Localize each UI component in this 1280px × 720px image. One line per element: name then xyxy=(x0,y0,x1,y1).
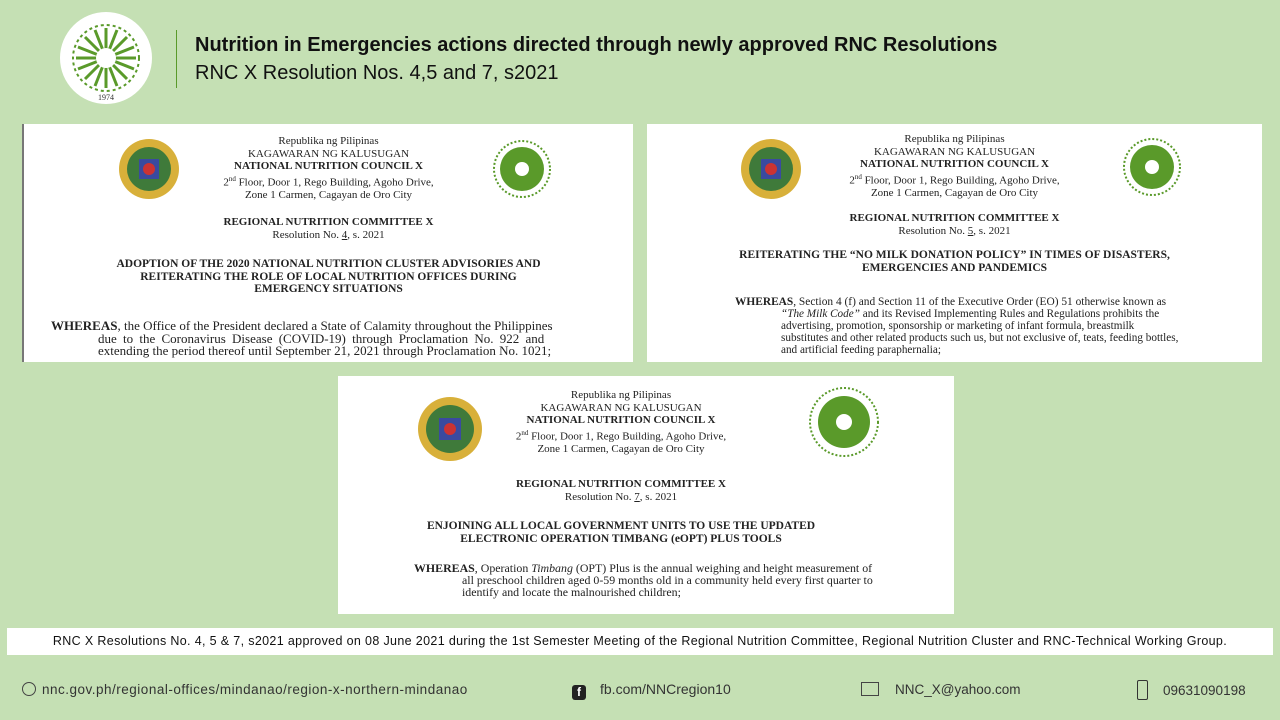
footer: phone xyxy=(1137,680,1246,700)
panel: resolution 4: Zone 1 Carmen, Cagayan de Oro City xyxy=(245,189,412,201)
panel: resolution 7: all preschool children aged 0-59 months old in a community held every first quarter to xyxy=(462,573,873,587)
panel: resolution 4: REGIONAL NUTRITION COMMITTEE X xyxy=(224,216,433,228)
panel: resolution 5: REGIONAL NUTRITION COMMITTEE X xyxy=(850,212,1059,224)
caption bar: RNC X Resolutions No. 4, 5 & 7, s2021 approved on 08 June 2021 during the 1st Semester Meeting of the Regional Nutrition Committee, Regional Nutrition Cluster and RNC-Technical Working Group. xyxy=(53,634,1227,648)
panel: resolution 7: 2nd Floor, Door 1, Rego Building, Agoho Drive, xyxy=(516,428,726,442)
panel: resolution 4: extending the period thereof until September 21, 2021 through Proclamation No. 1021; xyxy=(98,343,551,358)
footer: phone: 09631090198 xyxy=(1163,683,1246,698)
panel: resolution 5: substitutes and other related products such us, but not exclusive of, teats, feeding bottles, xyxy=(781,332,1178,344)
footer: facebook: f xyxy=(577,685,581,699)
caption bar xyxy=(7,628,1273,655)
panel: resolution 7: Resolution No. 7, s. 2021 xyxy=(565,490,677,502)
panel: resolution 4: Resolution No. 4, s. 2021 xyxy=(272,228,385,240)
panel: resolution 5: advertising, promotion, sponsorship or marketing of infant formula, breastmilk xyxy=(781,320,1134,332)
panel: resolution 5: EMERGENCIES AND PANDEMICS xyxy=(862,262,1047,274)
panel: resolution 4: NATIONAL NUTRITION COUNCIL X xyxy=(234,160,423,172)
divider line xyxy=(176,30,177,88)
panel: resolution 5: Zone 1 Carmen, Cagayan de Oro City xyxy=(871,187,1038,199)
panel: resolution 5: NATIONAL NUTRITION COUNCIL X xyxy=(860,158,1049,170)
panel: resolution 7: identify and locate the malnourished children; xyxy=(462,585,681,599)
panel: resolution 4: due to the Coronavirus Disease (COVID-19) through Proclamation No. 922 and xyxy=(98,330,544,346)
panel: resolution 5: “The Milk Code” and its Revised Implementing Rules and Regulations prohibits the xyxy=(781,308,1159,320)
panel: resolution 5: WHEREAS, Section 4 (f) and Section 11 of the Executive Order (EO) 51 otherwise known as xyxy=(735,296,1166,308)
panel: resolution 4 xyxy=(22,124,633,362)
footer: website: nnc.gov.ph/regional-offices/mindanao/region-x-northern-mindanao xyxy=(42,682,468,697)
logo: national nutrition council xyxy=(60,12,152,104)
panel: resolution 7: REGIONAL NUTRITION COMMITTEE X xyxy=(516,478,726,490)
panel: resolution 7: Zone 1 Carmen, Cagayan de Oro City xyxy=(537,443,705,455)
subtitle: RNC X Resolution Nos. 4,5 and 7, s2021 xyxy=(195,62,559,84)
panel: resolution 7: KAGAWARAN NG KALUSUGAN xyxy=(540,402,702,414)
title: Nutrition in Emergencies actions directed through newly approved RNC Resolutions xyxy=(195,34,997,56)
panel: resolution 5 xyxy=(647,124,1262,362)
panel: resolution 7 xyxy=(338,376,954,614)
panel: resolution 7: Republika ng Pilipinas xyxy=(571,389,671,401)
panel: resolution 5: KAGAWARAN NG KALUSUGAN xyxy=(874,146,1035,158)
panel: resolution 7: NATIONAL NUTRITION COUNCIL X xyxy=(527,414,715,426)
panel: resolution 4: EMERGENCY SITUATIONS xyxy=(254,283,403,295)
panel: resolution 7: ENJOINING ALL LOCAL GOVERNMENT UNITS TO USE THE UPDATED xyxy=(427,520,815,532)
panel: resolution 7: ELECTRONIC OPERATION TIMBANG (eOPT) PLUS TOOLS xyxy=(460,532,782,544)
panel: resolution 4: Republika ng Pilipinas xyxy=(278,135,379,147)
panel: resolution 5: and artificial feeding paraphernalia; xyxy=(781,344,941,356)
panel: resolution 5: Republika ng Pilipinas xyxy=(904,133,1005,145)
panel: resolution 4: 2nd Floor, Door 1, Rego Building, Agoho Drive, xyxy=(223,174,434,188)
panel: resolution 4: KAGAWARAN NG KALUSUGAN xyxy=(248,148,409,160)
footer: email: NNC_X@yahoo.com xyxy=(895,682,1021,697)
panel: resolution 7: WHEREAS, Operation Timbang (OPT) Plus is the annual weighing and height measurement of xyxy=(414,561,872,575)
panel: resolution 4: REITERATING THE ROLE OF LOCAL NUTRITION OFFICES DURING xyxy=(140,270,517,282)
panel: resolution 5: Resolution No. 5, s. 2021 xyxy=(898,224,1011,236)
logo: national nutrition council: 1974 xyxy=(98,93,114,102)
panel: resolution 4: ADOPTION OF THE 2020 NATIONAL NUTRITION CLUSTER ADVISORIES AND xyxy=(116,258,541,270)
footer: facebook: fb.com/NNCregion10 xyxy=(600,681,731,697)
panel: resolution 4: WHEREAS, the Office of the President declared a State of Calamity throughout the Philippines xyxy=(51,318,553,333)
panel: resolution 5: 2nd Floor, Door 1, Rego Building, Agoho Drive, xyxy=(849,172,1060,186)
panel: resolution 5: REITERATING THE “NO MILK DONATION POLICY” IN TIMES OF DISASTERS, xyxy=(739,249,1170,261)
footer: facebook xyxy=(572,681,731,700)
